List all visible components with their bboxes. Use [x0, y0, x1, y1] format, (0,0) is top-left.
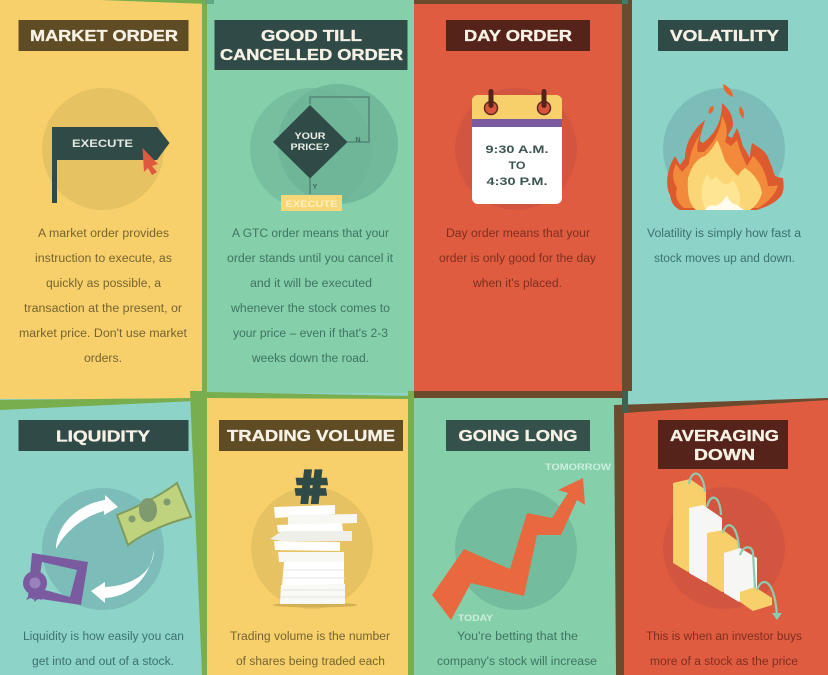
icon: price flowchart: N	[355, 137, 361, 144]
chart: rising stock arrow: TOMORROW	[545, 462, 611, 473]
icon: price flowchart: PRICE?	[290, 142, 330, 152]
heading: averaging down: AVERAGING	[670, 428, 779, 445]
text: averaging down description: This is when an investor buys	[646, 631, 802, 643]
panel: trading volume	[190, 391, 414, 675]
chart: descending price bars	[663, 474, 785, 620]
heading: good till cancelled order: GOOD TILL	[261, 28, 362, 45]
text: market order description: market price. Don't use market	[19, 328, 188, 340]
heading: day order	[446, 20, 590, 51]
text: market order description: orders.	[84, 353, 122, 365]
heading: day order: DAY ORDER	[464, 28, 572, 45]
panel: averaging down	[614, 391, 828, 675]
icon: calendar	[455, 88, 577, 210]
panel: day order	[414, 0, 632, 391]
heading: volatility	[658, 20, 788, 51]
text: volatility description: Volatility is simply how fast a	[647, 228, 802, 240]
heading: averaging down	[658, 420, 788, 469]
heading: liquidity	[18, 420, 188, 451]
text: good till cancelled description: A GTC order means that your	[232, 228, 389, 240]
heading: going long: GOING LONG	[458, 428, 578, 445]
heading: liquidity: LIQUIDITY	[56, 428, 151, 446]
heading: trading volume: TRADING VOLUME	[227, 428, 395, 445]
icon: paper stack with hash: #	[289, 463, 333, 513]
text: going long description	[437, 631, 597, 668]
icon: price flowchart	[250, 84, 398, 211]
text: day order description: order is only good for the day	[439, 253, 596, 265]
icon: execute flag: EXECUTE	[72, 138, 133, 150]
heading: volatility: VOLATILITY	[670, 28, 780, 45]
icon: flame	[663, 84, 785, 210]
text: volatility description: stock moves up and down.	[654, 253, 795, 265]
panel: volatility	[622, 0, 828, 403]
text: trading volume description	[230, 631, 390, 668]
text: good till cancelled description: your price – even if that's 2-3	[233, 328, 388, 340]
panel: going long	[414, 391, 622, 675]
text: trading volume description: of shares being traded each	[236, 656, 385, 668]
heading: good till cancelled order	[214, 20, 408, 70]
text: market order description: quickly as possible, a	[46, 278, 162, 290]
panel: good till cancelled order	[205, 0, 414, 393]
text: liquidity description: Liquidity is how easily you can	[23, 631, 184, 643]
text: day order description: when it's placed.	[472, 278, 562, 290]
icon: calendar: 9:30 A.M.	[486, 144, 548, 156]
heading: averaging down: DOWN	[694, 447, 755, 464]
chart: rising stock arrow: TODAY	[458, 613, 494, 624]
icon: price flowchart: YOUR	[294, 131, 326, 141]
text: market order description: transaction at the present, or	[24, 303, 182, 315]
text: trading volume description: Trading volume is the number	[230, 631, 390, 643]
text: averaging down description	[646, 631, 802, 668]
icon: money and certificate cycle	[23, 483, 191, 610]
text: day order description	[439, 228, 596, 290]
text: good till cancelled description	[227, 228, 394, 365]
text: good till cancelled description: weeks down the road.	[251, 353, 369, 365]
heading: good till cancelled order: CANCELLED ORDER	[220, 47, 403, 64]
text: market order description: A market order provides	[38, 228, 169, 240]
heading: market order: MARKET ORDER	[30, 28, 178, 45]
icon: execute flag	[42, 88, 170, 210]
text: going long description: You're betting that the	[457, 631, 578, 643]
heading: market order	[18, 20, 188, 51]
panel: market order	[0, 0, 208, 399]
text: good till cancelled description: whenever the stock comes to	[230, 303, 390, 315]
text: day order description: Day order means that your	[446, 228, 590, 240]
icon: price flowchart: EXECUTE	[286, 199, 338, 210]
text: going long description: company's stock will increase	[437, 656, 597, 668]
text: volatility description	[647, 228, 802, 265]
icon: paper stack with hash	[251, 463, 373, 609]
panel: liquidity	[0, 398, 207, 675]
text: good till cancelled description: order stands until you cancel it	[227, 253, 394, 265]
heading: going long	[446, 420, 590, 451]
text: liquidity description	[23, 631, 184, 668]
text: averaging down description: more of a stock as the price	[650, 656, 798, 668]
icon: calendar: 4:30 P.M.	[486, 176, 548, 188]
text: market order description	[19, 228, 188, 365]
chart: rising stock arrow	[432, 462, 611, 624]
icon: calendar: TO	[508, 160, 526, 172]
icon: price flowchart: Y	[313, 184, 318, 191]
text: market order description: instruction to execute, as	[35, 253, 172, 265]
text: liquidity description: get into and out of a stock.	[32, 656, 174, 668]
text: good till cancelled description: and it will be executed	[250, 278, 372, 290]
heading: trading volume	[219, 420, 403, 451]
